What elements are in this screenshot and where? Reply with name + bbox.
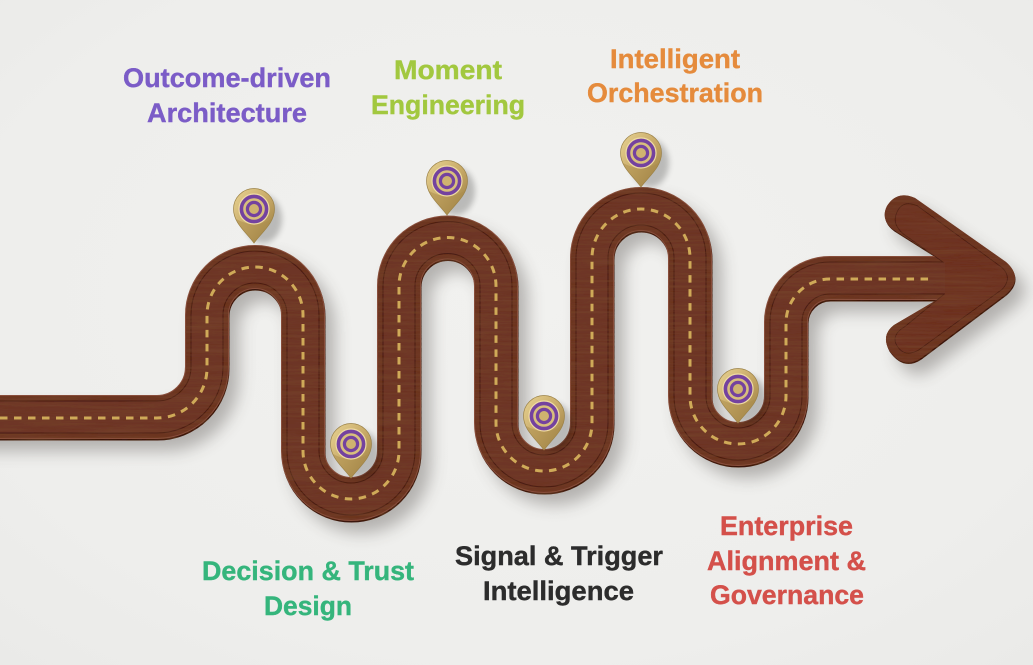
label: Intelligent Orchestration: Orchestration [587,78,763,108]
label: Decision & Trust Design: Design [264,591,352,621]
label: Signal & Trigger Intelligence [455,541,663,606]
map pin 3 [620,132,669,187]
label: Outcome-driven Architecture: Outcome-driven [123,63,331,93]
label: Enterprise Alignment & Governance: Alignment & [707,546,866,576]
label: Enterprise Alignment & Governance: Governance [710,580,864,610]
label: Moment Engineering: Engineering [371,90,525,120]
label: Outcome-driven Architecture [123,63,331,128]
label: Enterprise Alignment & Governance [707,511,866,610]
label: Enterprise Alignment & Governance: Enterprise [720,511,853,541]
winding wooden road with arrow [0,195,1025,511]
map pin 1 [234,188,282,243]
label: Decision & Trust Design: Decision & Trust [202,556,414,586]
map pin 5 [524,395,572,450]
road centre dashes [0,209,934,499]
label: Decision & Trust Design [202,556,414,621]
map pin 6 [718,368,766,423]
label: Signal & Trigger Intelligence: Signal & Trigger [455,541,663,571]
label: Intelligent Orchestration: Intelligent [610,44,740,74]
map pin 4 [330,423,379,478]
label: Moment Engineering [371,55,525,120]
label: Moment Engineering: Moment [394,55,502,85]
label: Intelligent Orchestration [587,44,763,108]
map pin 2 [426,160,475,215]
road shadow [0,207,1025,511]
label: Outcome-driven Architecture: Architecture [147,98,307,128]
label: Signal & Trigger Intelligence: Intelligence [483,576,634,606]
wood body [0,195,1016,501]
